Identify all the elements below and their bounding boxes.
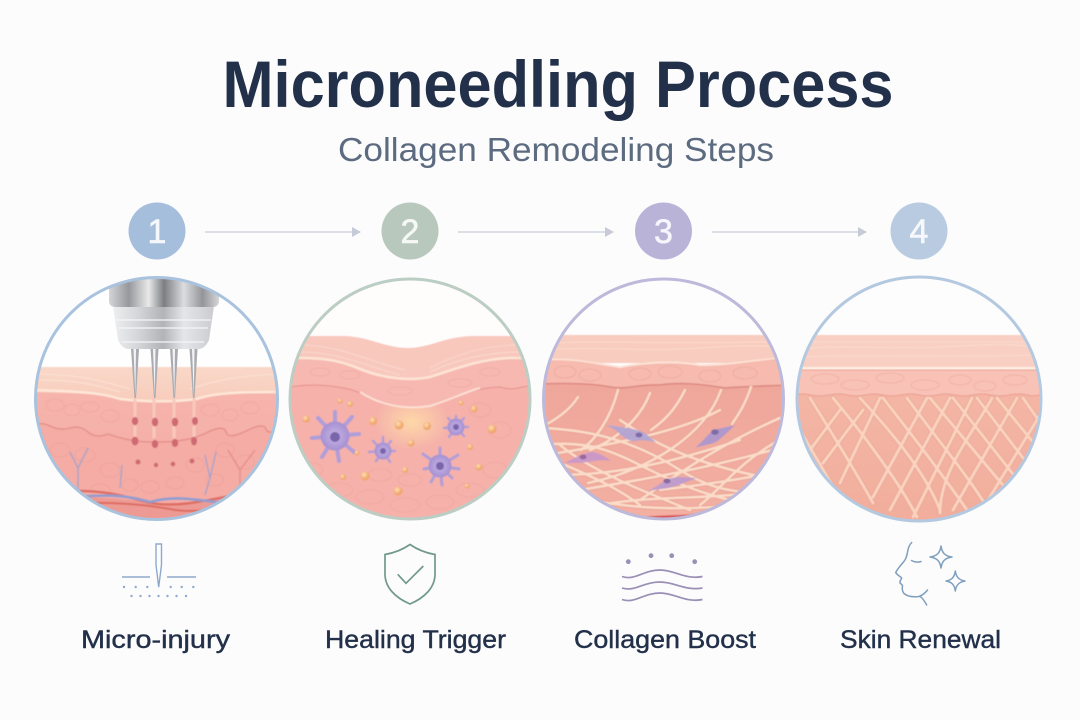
step 1 number badge	[128, 202, 186, 260]
needle tracks	[135, 398, 194, 438]
immune cells	[312, 412, 468, 485]
granular layer	[293, 358, 527, 406]
device collar	[113, 306, 214, 349]
cell layer	[793, 370, 1045, 396]
collagen fibers shadow	[562, 412, 770, 512]
dermis	[545, 384, 782, 518]
label: skin renewal: Skin Renewal	[840, 626, 1001, 654]
capillaries	[70, 448, 216, 495]
dermis layer	[37, 392, 276, 442]
epidermis	[540, 335, 790, 363]
growth factor dots	[302, 398, 496, 496]
blood vessels	[90, 497, 221, 518]
step 4 number badge: 4	[910, 213, 928, 251]
icon: collagen waves	[622, 553, 702, 601]
panel: micro-injury skin cross-section	[30, 270, 285, 525]
dermis	[795, 393, 1045, 525]
tissue texture	[301, 368, 511, 512]
step 1 number badge: 1	[148, 213, 166, 251]
subtitle: Collagen Remodeling Steps	[338, 131, 774, 168]
step 4 number badge	[890, 202, 948, 260]
step 2 number badge: 2	[401, 213, 419, 251]
light band	[802, 367, 1036, 370]
lower dermis with wavy boundary	[40, 422, 272, 444]
panel: skin renewal cross-section	[793, 277, 1045, 525]
red vessel hint	[645, 515, 695, 518]
title: Microneedling Process	[222, 47, 894, 121]
device head	[109, 279, 219, 307]
step 2 number badge	[382, 202, 438, 260]
collagen lattice	[800, 398, 1042, 517]
stratum layer	[795, 335, 1045, 367]
needles	[131, 349, 198, 398]
collagen fibers	[540, 387, 785, 512]
fibroblasts	[565, 425, 735, 491]
panel: collagen boost skin cross-section	[540, 279, 790, 525]
epidermis with dent	[299, 336, 521, 378]
label: collagen boost: Collagen Boost	[574, 626, 756, 654]
epidermis	[30, 367, 285, 401]
icon: face with sparkles	[896, 542, 965, 605]
inflammation glow	[382, 406, 442, 444]
micro-channel holes	[132, 417, 198, 467]
arrow: step 1 to 2	[205, 227, 361, 237]
arrow: step 3 to 4	[712, 227, 867, 237]
label: healing trigger: Healing Trigger	[325, 626, 506, 654]
dermis	[292, 385, 528, 518]
arrow: step 2 to 3	[458, 227, 614, 237]
label: micro-injury: Micro-injury	[81, 626, 231, 654]
step 3 number badge: 3	[654, 213, 673, 251]
step 3 number badge	[635, 202, 692, 260]
icon: shield with check	[385, 544, 435, 604]
collagen lattice shadow	[807, 396, 1038, 502]
cell texture	[46, 399, 259, 496]
icon: needle piercing skin	[122, 544, 196, 597]
panel: healing trigger skin cross-section	[285, 279, 538, 525]
cell layer	[546, 360, 781, 388]
